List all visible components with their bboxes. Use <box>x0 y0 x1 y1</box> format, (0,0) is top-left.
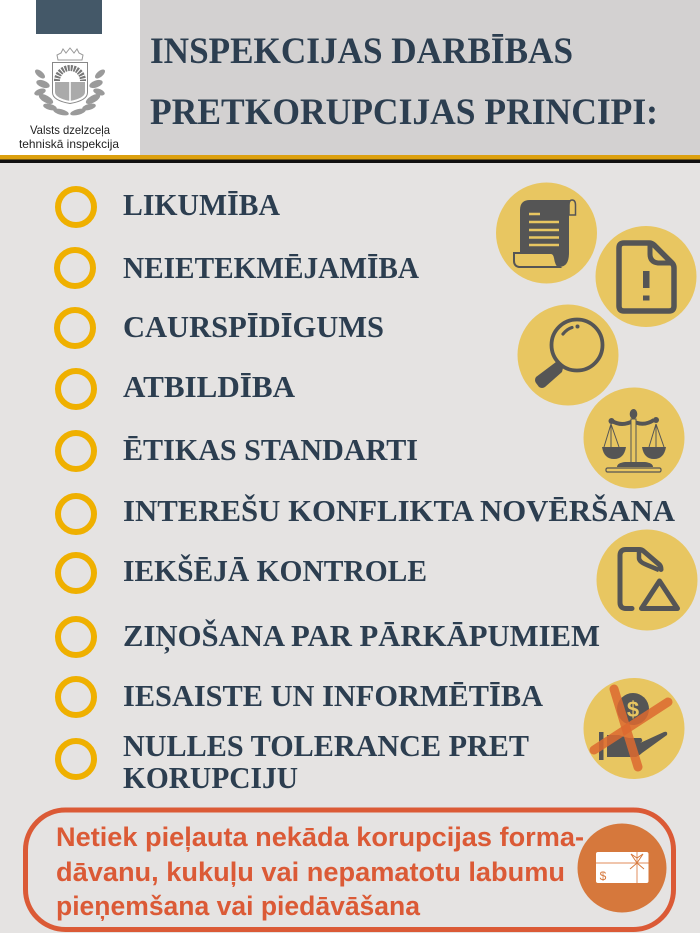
icon: magnifying glass <box>518 304 618 406</box>
callout: zero tolerance statement: Netiek pieļauta nekāda korupcijas forma- <box>56 822 584 852</box>
icon: gift card <box>578 824 666 912</box>
item 3: CAURSPĪDĪGUMS <box>123 309 384 344</box>
item 5: ĒTIKAS STANDARTI <box>123 432 418 467</box>
item 6: INTEREŠU KONFLIKTA NOVĒRŠANA <box>123 493 676 528</box>
header band <box>0 0 700 163</box>
logo panel <box>0 0 140 155</box>
principles list <box>57 187 676 795</box>
icon: document with triangle <box>596 530 698 630</box>
item 9: IESAISTE UN INFORMĒTĪBA <box>123 678 544 713</box>
item 8: ZIŅOŠANA PAR PĀRKĀPUMIEM <box>123 618 600 654</box>
title: PRETKORUPCIJAS PRINCIPI: <box>150 92 658 133</box>
title <box>150 31 658 133</box>
item 10: NULLES TOLERANCE PRET <box>123 728 529 763</box>
item 1 <box>58 187 281 225</box>
item 4: ATBILDĪBA <box>123 369 296 404</box>
item 4 <box>58 369 296 407</box>
icon: crossed-out hand with coin: $ <box>627 697 639 722</box>
item 7: IEKŠĒJĀ KONTROLE <box>123 553 427 588</box>
callout: zero tolerance statement: dāvanu, kukuļu vai nepamatotu labumu <box>56 857 565 887</box>
item 1: LIKUMĪBA <box>123 187 281 222</box>
logo caption: tehniskā inspekcija <box>19 137 119 151</box>
icon: crossed-out hand with coin <box>584 678 684 779</box>
icon: scales of justice <box>584 388 684 488</box>
callout: zero tolerance statement: pieņemšana vai piedāvāšana <box>56 891 420 921</box>
icon: gift card: $ <box>600 869 607 883</box>
icon: document with exclamation mark <box>596 226 696 327</box>
item 10 <box>58 728 529 795</box>
item 10: KORUPCIJU <box>123 760 298 795</box>
logo caption: Valsts dzelzceļa <box>30 123 110 137</box>
icon: coat of arms <box>33 48 107 117</box>
logo caption <box>19 123 119 151</box>
item 2: NEIETEKMĒJAMĪBA <box>123 250 420 285</box>
callout: zero tolerance statement <box>26 810 674 930</box>
icon: scroll <box>496 182 597 284</box>
title: INSPEKCIJAS DARBĪBAS <box>150 31 573 72</box>
